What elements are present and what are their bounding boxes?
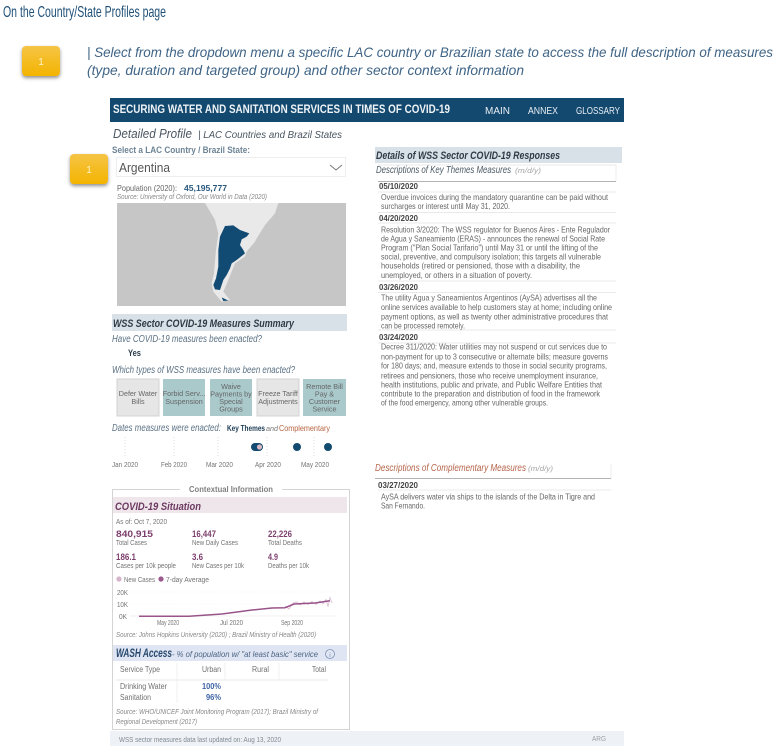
timeline chart: Jan 2020 xyxy=(112,460,138,469)
entry: 03/24/2020: Decree 311/2020: Water utilities may not suspend or cut services due to xyxy=(381,342,607,352)
heading: COVID-19 situation xyxy=(113,497,347,513)
table source xyxy=(116,707,319,726)
heading: measures summary: WSS Sector COVID-19 Measures Summary xyxy=(113,318,295,330)
button: remote bill pay xyxy=(303,379,346,416)
statistics: 840,915 xyxy=(116,529,153,539)
entry: 03/24/2020: 03/24/2020 xyxy=(379,333,419,342)
badge: step 1 xyxy=(22,46,60,76)
table source: Regional Development (2017) xyxy=(116,717,197,726)
heading: measures summary xyxy=(112,314,347,331)
entry: 05/10/2020 xyxy=(379,182,609,211)
entry: 04/20/2020: de Agua y Saneamiento (ERAS) - announces the renewal of Social Rate xyxy=(381,234,605,244)
statistics: 3.6 xyxy=(192,552,203,562)
button: defer water bills xyxy=(117,379,159,416)
statistics: Cases per 10k people xyxy=(116,561,176,570)
question: measures enacted: Have COVID-19 measures been enacted? xyxy=(112,334,262,345)
entry: 03/24/2020: of the food emergency, among other vulnerable groups. xyxy=(381,398,548,408)
timeline legend: and xyxy=(266,424,279,433)
icon: info: i xyxy=(329,652,331,659)
button: remote bill pay: Customer xyxy=(309,397,341,406)
entry: 03/24/2020: contribute to the preparation and distribution of food in the framework xyxy=(381,390,601,398)
statistics: 186.1 xyxy=(116,552,136,562)
page subtitle xyxy=(113,127,343,141)
timeline legend xyxy=(112,423,331,434)
dropdown: country selector: Argentina xyxy=(119,161,170,175)
footer bar: ARG xyxy=(592,736,606,743)
map: Argentina xyxy=(117,203,346,306)
dashboard header bar xyxy=(110,98,624,122)
entry: 03/24/2020: for 180 days; and, measure extends to those in social security programs, xyxy=(381,362,607,370)
panel: contextual information xyxy=(112,485,350,730)
subheading: key themes: (m/d/y) xyxy=(515,168,541,175)
icon: info xyxy=(326,650,334,659)
table: WASH access: Drinking Water xyxy=(120,682,167,691)
title: On the Country/State Profiles page xyxy=(3,4,166,21)
button: waive payments: Payments by xyxy=(210,390,252,398)
population: Population (2020): xyxy=(117,184,177,193)
statistics: Total Deaths xyxy=(268,538,302,547)
entry: 04/20/2020: Program ("Plan Social Tarifario") until May 31 or until the lifting of the xyxy=(381,244,598,252)
entry: 03/27/2020 xyxy=(378,481,595,510)
question: measure types: Which types of WSS measures have been enacted? xyxy=(112,365,295,376)
button: waive payments: Waive xyxy=(221,382,241,391)
entry: 04/20/2020: unemployed, or others in a situation of poverty. xyxy=(381,271,532,280)
statistics: Deaths per 10k xyxy=(268,561,309,570)
entry: 03/27/2020: San Fernando. xyxy=(381,502,425,510)
measure type buttons xyxy=(117,379,346,416)
page subtitle: | LAC Countries and Brazil States xyxy=(198,129,343,141)
chart legend: 7-day Average xyxy=(166,575,209,584)
entry: 03/24/2020: retirees and pensioners, those who receive unemployment insurance, xyxy=(381,372,598,380)
dropdown label: Select a LAC Country / Brazil State: xyxy=(112,145,250,155)
dashboard header bar: MAIN xyxy=(485,105,510,117)
timeline chart: Apr 2020 xyxy=(255,460,281,469)
subheading: key themes: Descriptions of Key Themes Measures xyxy=(376,165,511,176)
population xyxy=(117,183,267,201)
button: remote bill pay: Remote Bill xyxy=(306,382,343,391)
statistics: 4.9 xyxy=(268,552,278,562)
line chart: new cases: 10K xyxy=(117,600,128,609)
instruction text: (type, duration and targeted group) and other sector context information xyxy=(87,62,524,78)
button: freeze tariff: Adjustments xyxy=(258,397,298,406)
entry: 03/24/2020: health institutions, public and private, and Public Welfare Entities that xyxy=(381,380,603,390)
button: defer water bills: Bills xyxy=(131,397,145,406)
timeline chart: Feb 2020 xyxy=(161,460,187,469)
entry: 03/24/2020 xyxy=(379,333,608,408)
timeline chart: Mar 2020 xyxy=(206,460,233,469)
button: remote bill pay: Pay & xyxy=(315,390,334,398)
button: remote bill pay: Service xyxy=(313,404,336,414)
badge: dropdown marker xyxy=(70,154,108,184)
population: 45,195,777 xyxy=(184,183,227,193)
button: forbid service suspension: Suspension xyxy=(165,397,203,406)
chart legend xyxy=(116,575,209,584)
dashboard header bar: SECURING WATER AND SANITATION SERVICES IN TIMES OF COVID-19 xyxy=(113,102,450,116)
question: measures enacted xyxy=(112,334,262,358)
dashboard header bar: ANNEX xyxy=(528,105,558,117)
line chart: new cases xyxy=(117,588,336,627)
heading: COVID-19 situation: COVID-19 Situation xyxy=(115,501,201,513)
statistics: 22,226 xyxy=(268,529,292,539)
button: forbid service suspension: Forbid Serv... xyxy=(163,389,205,398)
map: South America landmass xyxy=(205,203,278,302)
statistics: New Daily Cases xyxy=(192,538,238,547)
entry: 03/27/2020: 03/27/2020 xyxy=(378,481,419,490)
entry: 05/10/2020: surcharges or interest until May 31, 2020. xyxy=(381,202,510,211)
question: measures enacted: Yes xyxy=(128,348,141,358)
map: Argentina shape xyxy=(213,225,249,301)
timeline legend: Key Themes xyxy=(227,424,265,433)
table: WASH access: Rural xyxy=(252,665,269,674)
button: waive payments xyxy=(210,379,252,416)
entry: 05/10/2020: 05/10/2020 xyxy=(379,182,419,191)
entry: 04/20/2020: 04/20/2020 xyxy=(379,214,419,223)
heading: WASH access: WASH Access xyxy=(116,648,172,660)
entry: 04/20/2020: social, preventive, and compulsory isolation; this targets all vulnerable xyxy=(381,252,601,262)
button: freeze tariff: Freeze Tariff xyxy=(258,389,298,398)
footer bar xyxy=(110,731,624,746)
line chart: new cases: Jul 2020 xyxy=(220,618,243,627)
as-of date: As of: Oct 7, 2020 xyxy=(116,517,167,526)
dashboard header bar: GLOSSARY xyxy=(576,105,620,117)
statistics xyxy=(116,529,309,570)
heading: WASH access xyxy=(113,645,347,661)
entry: 03/26/2020: 03/26/2020 xyxy=(379,283,419,292)
panel title: Contextual Information xyxy=(189,485,273,494)
timeline legend: Dates measures were enacted: xyxy=(112,423,221,434)
panel: key themes measures xyxy=(376,165,616,408)
statistics: Total Cases xyxy=(116,538,147,547)
statistics: 16,447 xyxy=(192,529,216,539)
panel: complementary measures xyxy=(375,463,611,510)
instruction text xyxy=(87,44,773,78)
entry: 03/26/2020: online services available to help customers stay at home; including online xyxy=(381,303,612,312)
line chart: new cases: Sep 2020 xyxy=(281,618,303,627)
button: waive payments: Groups xyxy=(219,404,243,414)
badge: step 1: 1 xyxy=(38,57,44,68)
chart legend: New Cases xyxy=(124,575,155,584)
entry: 03/26/2020: The utility Agua y Saneamientos Argentinos (AySA) advertises all the xyxy=(381,294,597,302)
timeline chart: May 2020 xyxy=(301,460,329,469)
table: WASH access: Service Type xyxy=(120,665,160,674)
footer bar: WSS sector measures data last updated on: Aug 13, 2020 xyxy=(119,735,281,744)
table: WASH access: Total xyxy=(312,665,326,674)
table: WASH access: Sanitation xyxy=(120,693,151,702)
line chart: new cases: 20K xyxy=(117,588,128,597)
subheading: complementary: (m/d/y) xyxy=(528,466,553,473)
entry: 03/27/2020: AySA delivers water via ships to the islands of the Delta in Tigre and xyxy=(381,492,595,502)
heading: details of responses: Details of WSS Sector COVID-19 Responses xyxy=(376,150,560,162)
line chart: new cases: May 2020 xyxy=(157,618,179,627)
chart source: Source: Johns Hopkins University (2020) ; Brazil Ministry of Health (2020) xyxy=(116,630,316,639)
entry: 04/20/2020: Resolution 3/2020: The WSS regulator for Buenos Aires - Ente Regulador xyxy=(381,226,610,234)
page subtitle: Detailed Profile xyxy=(113,127,192,141)
population: Source: University of Oxford, Our World in Data (2020) xyxy=(117,192,267,201)
button: defer water bills: Defer Water xyxy=(119,389,158,398)
table: WASH access: 100% xyxy=(202,682,222,691)
button: forbid service suspension xyxy=(163,379,205,416)
button: freeze tariff xyxy=(257,379,299,416)
entry: 04/20/2020: households (retired or pensioned, those with a disability, the xyxy=(381,262,580,270)
statistics: New Cases per 10k xyxy=(192,561,244,570)
entry: 03/24/2020: non-payment for up to 3 consecutive or alternate bills; measure governs xyxy=(381,352,608,362)
line chart: new cases: 0K xyxy=(119,612,127,621)
table: WASH access: Urban xyxy=(202,665,221,674)
timeline chart xyxy=(112,437,332,469)
dropdown: country selector xyxy=(116,158,346,176)
entry: 03/26/2020: can be processed remotely. xyxy=(381,322,465,330)
entry: 03/26/2020 xyxy=(379,283,612,330)
timeline legend: Complementary xyxy=(279,424,331,433)
entry: 04/20/2020 xyxy=(379,214,610,280)
heading: WASH access: - % of population w/ "at least basic" service xyxy=(172,649,318,659)
table source: Source: WHO/UNICEF Joint Monitoring Program (2017); Brazil Ministry of xyxy=(116,707,319,716)
entry: 03/26/2020: payment options, as well as twenty other administrative procedures that xyxy=(381,312,609,322)
subheading: complementary: Descriptions of Complementary Measures xyxy=(375,463,526,474)
table: WASH access: 96% xyxy=(206,693,222,702)
table: WASH access xyxy=(116,663,328,703)
button: waive payments: Special xyxy=(219,397,243,406)
entry: 05/10/2020: Overdue invoices during the mandatory quarantine can be paid without xyxy=(381,193,609,202)
badge: dropdown marker: 1 xyxy=(86,165,92,176)
